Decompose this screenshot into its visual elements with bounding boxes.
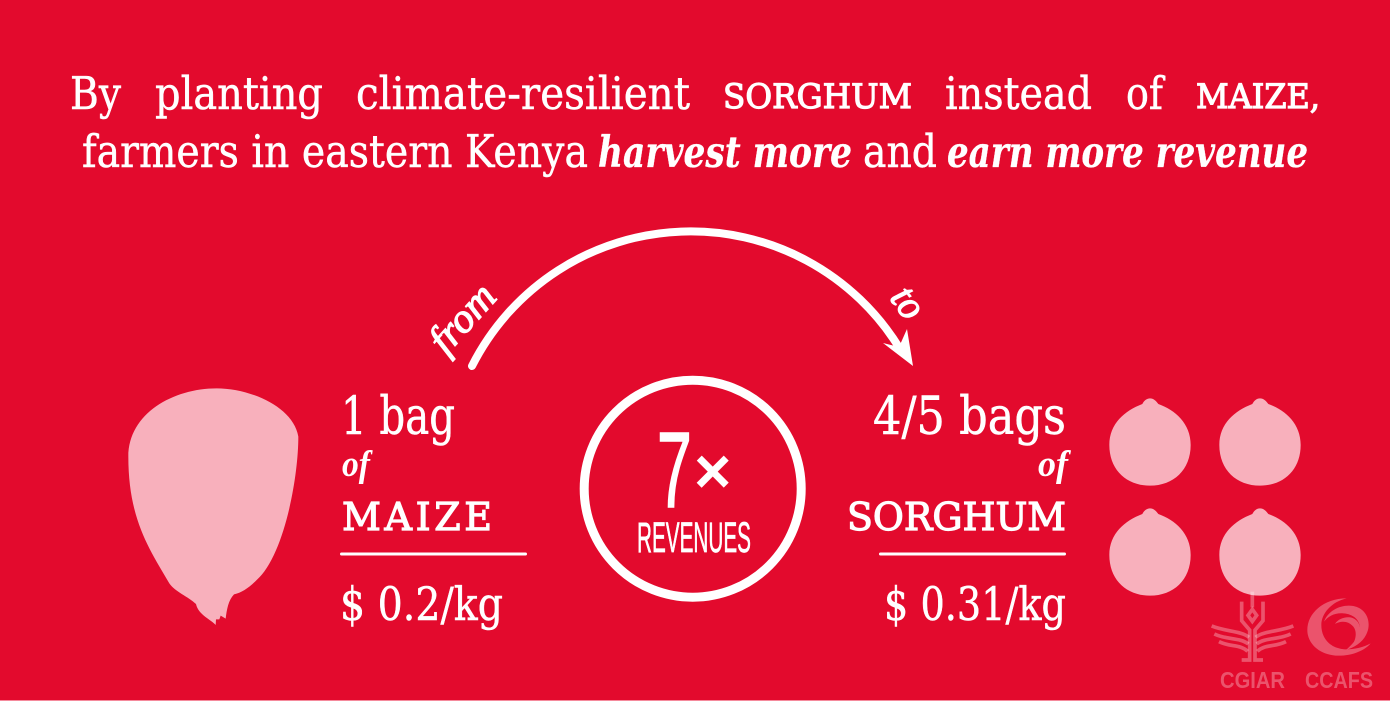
title: farmers in eastern Kenya bbox=[82, 125, 588, 178]
title: climate-resilient bbox=[356, 67, 690, 120]
logo: CGIAR bbox=[1212, 592, 1293, 693]
callout: 7x revenues: 7 bbox=[657, 409, 692, 530]
title: harvest more bbox=[598, 128, 852, 178]
title: MAIZE, bbox=[1196, 77, 1320, 117]
label: to: to bbox=[882, 276, 937, 328]
logo: CCAFS bbox=[1305, 598, 1373, 693]
sorghum text block: SORGHUM bbox=[847, 495, 1066, 539]
sorghum text block: $ 0.31/kg bbox=[884, 577, 1066, 631]
title bbox=[70, 67, 1320, 178]
icon: maize kernel bbox=[128, 388, 298, 625]
sorghum text block: of bbox=[1038, 444, 1072, 485]
title: instead bbox=[945, 67, 1092, 120]
sorghum text block: 4/5 bags bbox=[873, 387, 1066, 447]
sorghum text block bbox=[847, 387, 1072, 631]
title: earn more revenue bbox=[947, 128, 1308, 178]
maize text block bbox=[340, 387, 527, 631]
title: planting bbox=[155, 67, 323, 120]
label: from: from bbox=[419, 273, 505, 362]
icon: sorghum grains bbox=[1109, 398, 1301, 596]
maize text block: MAIZE bbox=[342, 495, 492, 539]
maize text block: of bbox=[342, 444, 373, 485]
callout: 7x revenues bbox=[584, 380, 801, 597]
logo: CGIAR: CGIAR bbox=[1220, 667, 1285, 693]
callout: 7x revenues: × bbox=[694, 435, 731, 507]
title: of bbox=[1126, 67, 1166, 120]
title: SORGHUM bbox=[723, 77, 912, 117]
maize text block: 1 bag bbox=[341, 387, 455, 447]
title: and bbox=[863, 125, 937, 178]
maize text block: $ 0.2/kg bbox=[340, 577, 503, 631]
logo: CCAFS: CCAFS bbox=[1305, 667, 1373, 693]
title: By bbox=[70, 67, 121, 120]
arrow: from maize to sorghum bbox=[472, 231, 913, 366]
callout: 7x revenues: REVENUES bbox=[637, 514, 751, 562]
